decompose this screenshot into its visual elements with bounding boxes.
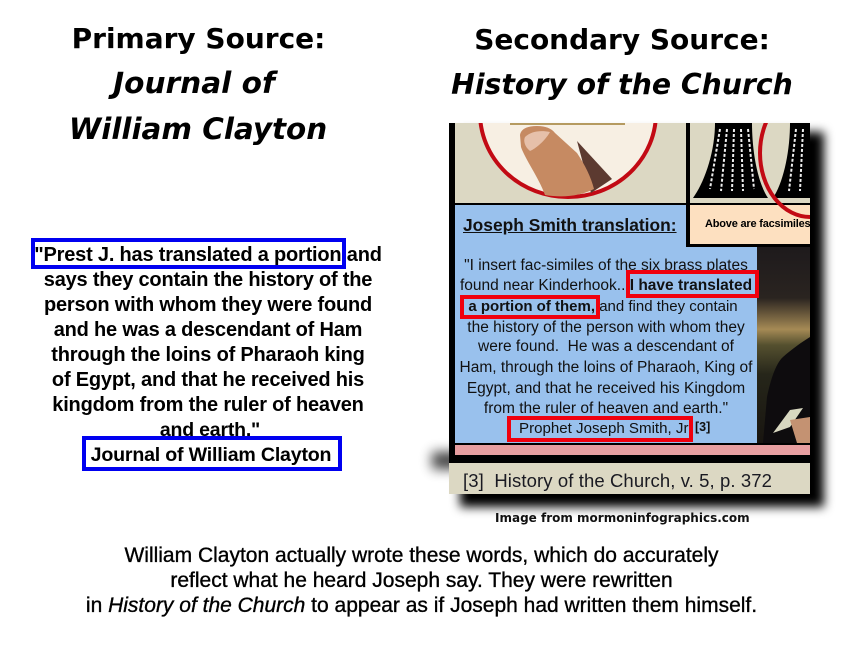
quotation: History of the Church: found near Kinderhook.. I have translated — [460, 277, 752, 294]
heading: secondary source: History of the Church — [451, 68, 793, 101]
panel: coin photo — [455, 123, 686, 203]
quotation: History of the Church: Ham, through the loins of Pharaoh, King of — [460, 359, 752, 376]
quotation: History of the Church — [460, 257, 752, 437]
heading: secondary source — [451, 23, 793, 101]
quotation: History of the Church: were found. He was a descendant of — [478, 338, 734, 355]
highlight: journal attribution — [82, 436, 342, 471]
quotation: History of the Church: Prophet Joseph Smith, Jr — [519, 420, 688, 437]
quotation: History of the Church: a portion of them, and find they contain — [468, 298, 738, 315]
journal quotation: Journal of William Clayton — [91, 444, 331, 466]
heading: Joseph Smith translation: Joseph Smith translation: — [463, 215, 677, 235]
quotation: History of the Church: [3] — [695, 420, 710, 434]
journal quotation: kingdom from the ruler of heaven — [52, 394, 364, 416]
journal quotation: person with whom they were found — [44, 294, 372, 316]
document image — [449, 123, 810, 494]
highlight: a portion of them — [460, 295, 600, 319]
explanatory caption: William Clayton actually wrote these words, which do accurately — [124, 544, 719, 567]
panel: footnote — [448, 463, 810, 494]
heading: secondary source: Secondary Source: — [474, 23, 770, 56]
panel: plate facsimiles — [690, 123, 810, 203]
icon: oval with thumb — [478, 123, 658, 199]
footnote citation: [3] History of the Church, v. 5, p. 372 — [463, 470, 772, 491]
journal quotation: says they contain the history of the — [44, 269, 372, 291]
journal quotation: through the loins of Pharaoh king — [51, 344, 365, 366]
explanatory caption: in History of the Church to appear as if Joseph had written them himself. — [86, 594, 757, 617]
panel: facsimile caption — [686, 205, 810, 247]
credit line: Image from mormoninfographics.com — [495, 511, 750, 525]
explanatory caption: reflect what he heard Joseph say. They were rewritten — [170, 569, 673, 592]
journal quotation: and earth." — [160, 419, 260, 441]
highlight: Prophet Joseph Smith — [507, 416, 693, 442]
heading: primary source: William Clayton — [69, 112, 327, 146]
quotation: History of the Church: Egypt, and that he received his Kingdom — [467, 380, 745, 397]
quotation: History of the Church: from the ruler of heaven and earth." — [484, 400, 728, 417]
journal quotation: and he was a descendant of Ham — [54, 319, 362, 341]
icon: brass plates — [693, 123, 810, 198]
journal quotation: of Egypt, and that he received his — [52, 369, 364, 391]
heading: primary source — [69, 22, 327, 146]
heading: primary source: Journal of — [113, 66, 275, 100]
explanatory caption — [86, 544, 757, 617]
drop shadow: document image — [460, 132, 824, 507]
drop shadow: left smear — [432, 452, 472, 469]
highlight: I have translated — [626, 270, 759, 298]
journal quotation — [34, 244, 382, 466]
quotation: History of the Church: the history of the person with whom they — [467, 319, 745, 336]
highlight: oval over plates — [758, 123, 810, 219]
panel: pink strip — [455, 445, 810, 455]
journal quotation: "Prest J. has translated a portion and — [34, 244, 382, 266]
panel: portrait painting — [757, 247, 810, 443]
panel: Joseph Smith translation — [455, 205, 757, 443]
heading: primary source: Primary Source: — [72, 22, 325, 55]
quotation: History of the Church: "I insert fac-similes of the six brass plates — [464, 257, 748, 274]
highlight: translated a portion — [31, 238, 346, 269]
